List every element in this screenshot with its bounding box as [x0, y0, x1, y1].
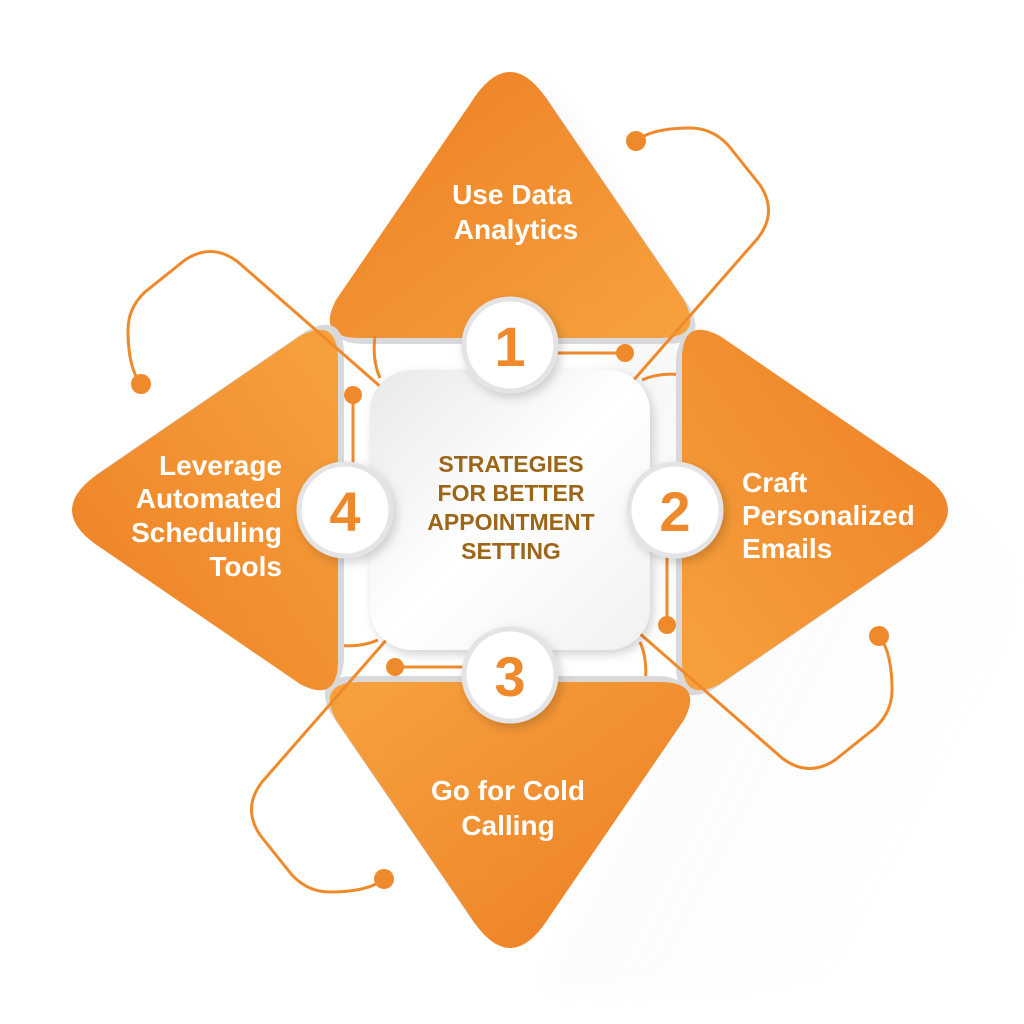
- label 2: Emails: [742, 533, 832, 564]
- center title: [427, 451, 595, 564]
- label 3: Calling: [461, 810, 555, 841]
- label 2: Personalized: [742, 500, 915, 531]
- number circle 3: [464, 629, 556, 721]
- label 4: Leverage: [159, 450, 282, 481]
- arm: right triangle: [638, 330, 948, 769]
- label 2: [742, 467, 915, 564]
- number circle 3: 3: [494, 645, 526, 708]
- label 1: Use Data: [452, 179, 572, 210]
- center title: FOR BETTER: [438, 480, 585, 506]
- number circle 4: [299, 464, 391, 556]
- label 4: Tools: [209, 551, 282, 582]
- arm: top triangle: [330, 72, 769, 382]
- label 2: Craft: [742, 467, 807, 498]
- number circle 1: [464, 299, 556, 391]
- number circle 4: 4: [329, 480, 361, 543]
- number circle 2: [629, 464, 721, 556]
- label 4: [131, 450, 282, 582]
- center title: APPOINTMENT: [427, 509, 595, 535]
- center panel: [370, 370, 650, 650]
- label 3: [431, 775, 585, 841]
- center title: SETTING: [461, 538, 561, 564]
- label 1: Analytics: [454, 214, 578, 245]
- label 1: [452, 179, 578, 245]
- label 4: Automated: [136, 483, 282, 514]
- arm: bottom triangle: [251, 638, 690, 948]
- label 3: Go for Cold: [431, 775, 585, 806]
- label 4: Scheduling: [131, 517, 282, 548]
- center title: STRATEGIES: [438, 451, 584, 477]
- number circle 2: 2: [659, 480, 691, 543]
- background long shadow: [540, 80, 1024, 1000]
- number circle 1: 1: [494, 315, 526, 378]
- arm: left triangle: [72, 251, 382, 690]
